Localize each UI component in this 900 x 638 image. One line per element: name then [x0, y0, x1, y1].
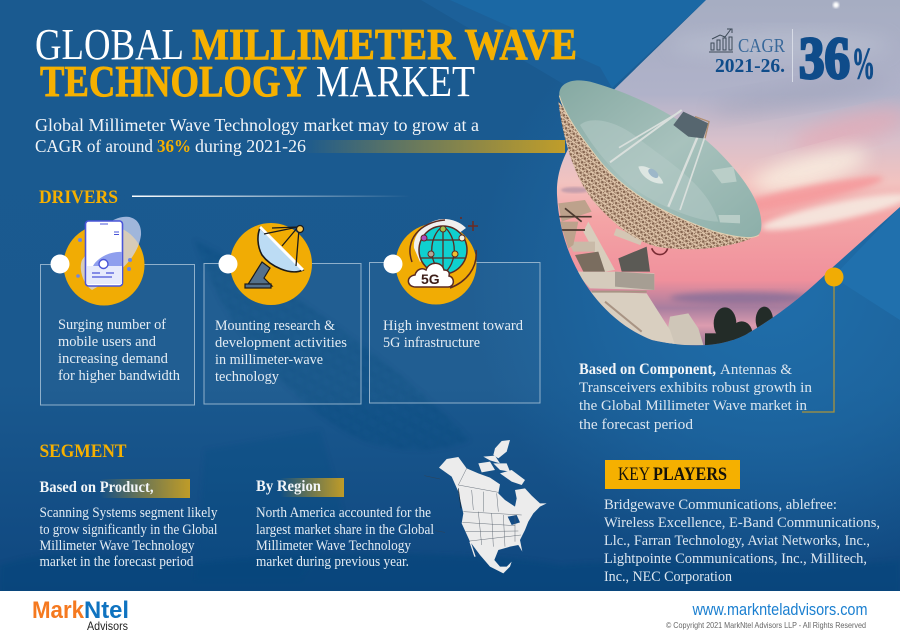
text block: based on product — [40, 479, 218, 570]
icon: smartphone — [76, 217, 141, 290]
trees — [705, 307, 773, 347]
text block: based on product: Millimeter Wave Technology — [40, 538, 195, 554]
title: TECHNOLOGY — [40, 57, 307, 106]
website and copyright — [666, 600, 868, 630]
panel: driver 3 5G: 5G infrastructure — [383, 335, 480, 351]
callout: component connector — [802, 268, 844, 412]
CAGR badge: 36 — [799, 25, 850, 91]
panel: driver 2 research: technology — [215, 369, 280, 385]
text block: key players list: Inc., NEC Corporation — [604, 569, 732, 585]
text block: key players list — [604, 497, 880, 585]
photo: satellite dish against sunset sky — [550, 0, 900, 350]
icon: bar chart growth — [709, 29, 733, 52]
text block: by region: market during previous year. — [256, 554, 409, 570]
panel: driver 1 mobile users: for higher bandwidth — [58, 368, 181, 384]
text: based on component: Antennas & — [720, 362, 792, 378]
CAGR badge: CAGR — [738, 35, 786, 57]
text block: key players list: Wireless Excellence, E-Band Communications, — [604, 515, 880, 531]
footer — [0, 591, 900, 638]
feed support tower — [610, 110, 705, 210]
heading: key players — [605, 460, 740, 489]
text block: by region: By Region — [256, 478, 321, 495]
text: based on component — [579, 361, 812, 433]
logo: MarkNtel Advisors: Advisors — [87, 619, 128, 633]
icon: satellite dish — [245, 226, 304, 288]
logo: MarkNtel Advisors: Mark — [32, 597, 85, 624]
text block: key players list: Bridgewave Communications, ablefree: — [604, 497, 837, 513]
text block: based on product: market in the forecast period — [40, 554, 194, 570]
title: GLOBAL — [35, 20, 184, 69]
CAGR badge: % — [852, 39, 875, 88]
panel: driver 1 mobile users — [40, 217, 194, 405]
CAGR badge — [709, 25, 875, 91]
logo: MarkNtel Advisors: Ntel — [84, 597, 129, 624]
text block: by region: Millimeter Wave Technology — [256, 538, 412, 554]
text block: by region — [256, 478, 434, 570]
text: based on component: the Global Millimeter Wave market in — [579, 398, 807, 414]
CAGR badge: 2021-26. — [715, 55, 785, 77]
dish back truss — [558, 102, 752, 249]
icon: globe and 5G cloud: 5G — [421, 271, 440, 287]
subtitle: during 2021-26 — [195, 136, 306, 156]
subtitle: Global Millimeter Wave Technology market may to grow at a — [35, 115, 479, 135]
dish face — [559, 80, 761, 238]
heading: segment: SEGMENT — [40, 441, 127, 462]
text: based on component: Based on Component, — [579, 361, 716, 378]
text: based on component: Transceivers exhibits robust growth in — [579, 380, 812, 396]
panel: driver 3 5G: High investment toward — [383, 318, 524, 334]
gold highlight bar — [300, 140, 565, 153]
subtitle: 36% — [157, 136, 191, 156]
text block: based on product: to grow significantly in the Global — [40, 522, 218, 538]
icon: globe and 5G cloud — [408, 217, 478, 288]
panel: driver 3 5G — [370, 217, 540, 403]
website and copyright: © Copyright 2021 MarkNtel Advisors LLP - All Rights Reserved — [666, 620, 866, 630]
panel: driver 2 research: in millimeter-wave — [215, 352, 323, 368]
subtitle: CAGR of around — [35, 136, 153, 156]
map: North America — [424, 440, 547, 573]
title: MILLIMETER WAVE — [192, 20, 577, 69]
panel: driver 1 mobile users: Surging number of — [58, 317, 166, 333]
subtitle — [35, 115, 479, 156]
panel: driver 2 research — [204, 223, 361, 404]
panel: driver 2 research: Mounting research & — [215, 318, 336, 334]
text block: by region: largest market share in the Global — [256, 522, 434, 538]
text block: key players list: Llc., Farran Technology, Aviat Networks, Inc., — [604, 533, 870, 549]
text block: based on product: Scanning Systems segment likely — [40, 505, 218, 521]
panel: driver 1 mobile users: mobile users and — [58, 334, 157, 350]
text block: based on product: Based on Product, — [40, 479, 154, 496]
heading: key players: PLAYERS — [653, 464, 727, 485]
text: based on component: the forecast period — [579, 417, 693, 433]
panel: driver 1 mobile users: increasing demand — [58, 351, 169, 367]
panel: driver 2 research: development activities — [215, 335, 347, 351]
heading: drivers: DRIVERS — [39, 187, 118, 208]
title: MARKET — [316, 57, 475, 106]
text block: key players list: Lightpointe Communications, Inc., Millitech, — [604, 551, 867, 567]
logo: MarkNtel Advisors — [32, 597, 129, 633]
title — [35, 20, 577, 106]
website and copyright: www.marknteladvisors.com — [692, 600, 868, 619]
heading: key players: KEY — [618, 464, 650, 485]
text block: by region: North America accounted for the — [256, 505, 431, 521]
